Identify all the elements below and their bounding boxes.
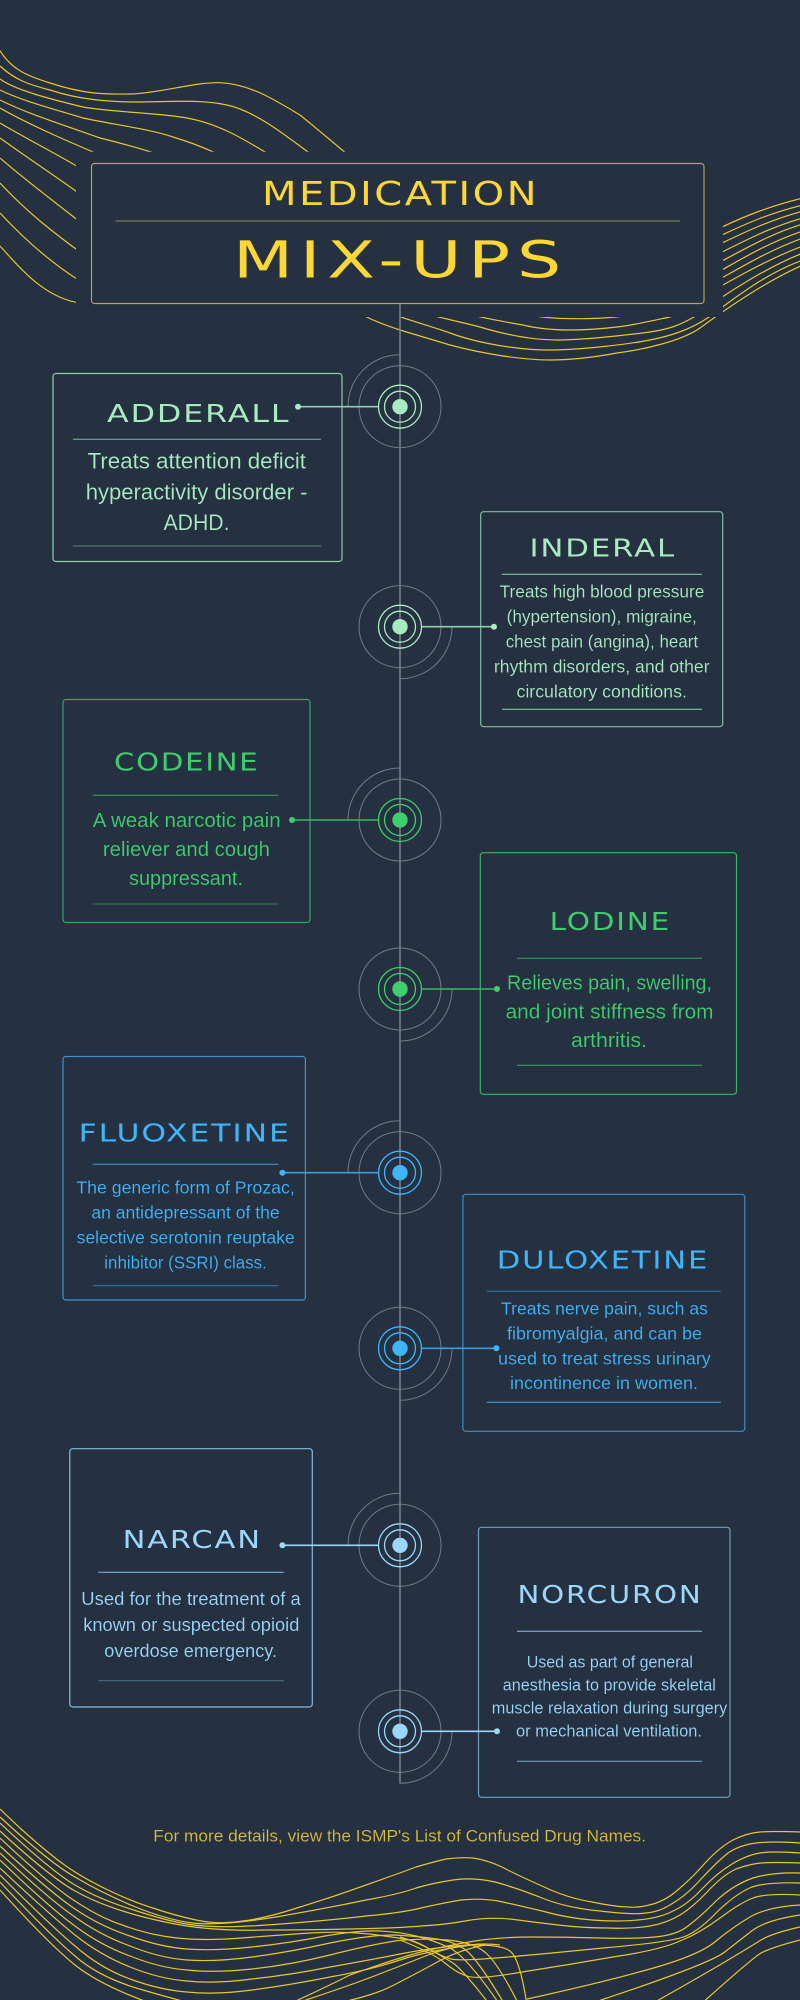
description [93,810,281,890]
description: or mechanical ventilation. [516,1723,702,1741]
drug name: LODINE [550,907,671,936]
drug name: NARCAN [123,1525,262,1554]
description: overdose emergency. [104,1640,277,1661]
description: chest pain (angina), heart [506,632,698,652]
timeline node: Lodine [359,948,500,1041]
description [492,1653,728,1741]
description: A weak narcotic pain [93,810,281,832]
card frame [480,853,736,1094]
title line 2: MIX-UPS [233,232,568,291]
panel: Inderal [481,512,723,727]
drug name: CODEINE [114,748,260,777]
description [81,1588,302,1661]
timeline node: Narcan [279,1493,441,1586]
description: arthritis. [571,1030,647,1052]
panel: Adderall [53,374,342,562]
description: fibromyalgia, and can be [507,1323,702,1343]
description: The generic form of Prozac, [76,1177,295,1197]
description: Used as part of general [527,1653,693,1671]
description: incontinence in women. [510,1373,698,1393]
description: (hypertension), migraine, [507,607,697,627]
card frame [478,1527,730,1797]
description [498,1298,711,1393]
description: Relieves pain, swelling, [507,972,712,994]
decorative waves: top left [0,51,347,302]
panel: Lodine [480,853,736,1094]
divider [517,1630,702,1632]
description: hyperactivity disorder - [86,479,308,504]
description: inhibitor (SSRI) class. [104,1252,267,1272]
card frame [63,1056,305,1300]
panel: title [92,164,704,304]
divider [517,957,702,959]
panel: Norcuron [478,1527,730,1797]
description: and joint stiffness from [506,1001,714,1023]
description: Used for the treatment of a [81,1588,302,1609]
timeline node: Norcuron [359,1690,500,1783]
description: reliever and cough [103,839,270,861]
card frame [63,700,310,922]
drug name: NORCURON [518,1580,702,1609]
divider [93,1163,278,1165]
description: Treats attention deficit [88,448,307,473]
card frame [481,512,723,727]
panel: Fluoxetine [63,1056,305,1300]
title divider [116,220,680,222]
description: circulatory conditions. [516,682,687,702]
description: used to treat stress urinary [498,1348,711,1368]
panel: Narcan [70,1449,312,1707]
timeline node: Inderal [359,586,497,679]
description: rhythm disorders, and other [494,657,710,677]
timeline node: Duloxetine [359,1307,499,1400]
footer note: For more details, view the ISMP's List of Confused Drug Names. [153,1827,646,1846]
timeline node: Codeine [289,768,441,861]
timeline node: Fluoxetine [279,1121,441,1214]
description: ADHD. [164,510,230,535]
title line 1: MEDICATION [262,174,539,213]
panel: Codeine [63,700,310,922]
description [76,1177,295,1272]
description: muscle relaxation during surgery [492,1700,728,1718]
description: selective serotonin reuptake [77,1227,295,1247]
description [506,972,714,1052]
divider [98,1571,284,1573]
timeline node: Adderall [295,355,441,448]
drug name: FLUOXETINE [79,1119,291,1148]
description: anesthesia to provide skeletal [503,1676,716,1694]
decorative waves: bottom [0,1809,800,2000]
panel: Duloxetine [463,1194,745,1431]
drug name: INDERAL [530,534,676,563]
card frame [53,374,342,562]
description: suppressant. [129,868,243,890]
description: Treats nerve pain, such as [501,1298,708,1318]
description: Treats high blood pressure [500,582,704,602]
drug name: DULOXETINE [497,1246,709,1275]
decorative waves: top right [365,198,800,360]
divider [487,1290,721,1292]
divider [73,438,321,440]
card frame [463,1194,745,1431]
divider [502,573,702,575]
drug name: ADDERALL [107,399,290,428]
timeline vertical line [399,304,401,1784]
description: known or suspected opioid [83,1614,299,1635]
description [494,582,710,702]
description [86,448,308,535]
divider [93,794,278,796]
title frame [92,164,704,304]
card frame [70,1449,312,1707]
description: an antidepressant of the [91,1202,280,1222]
